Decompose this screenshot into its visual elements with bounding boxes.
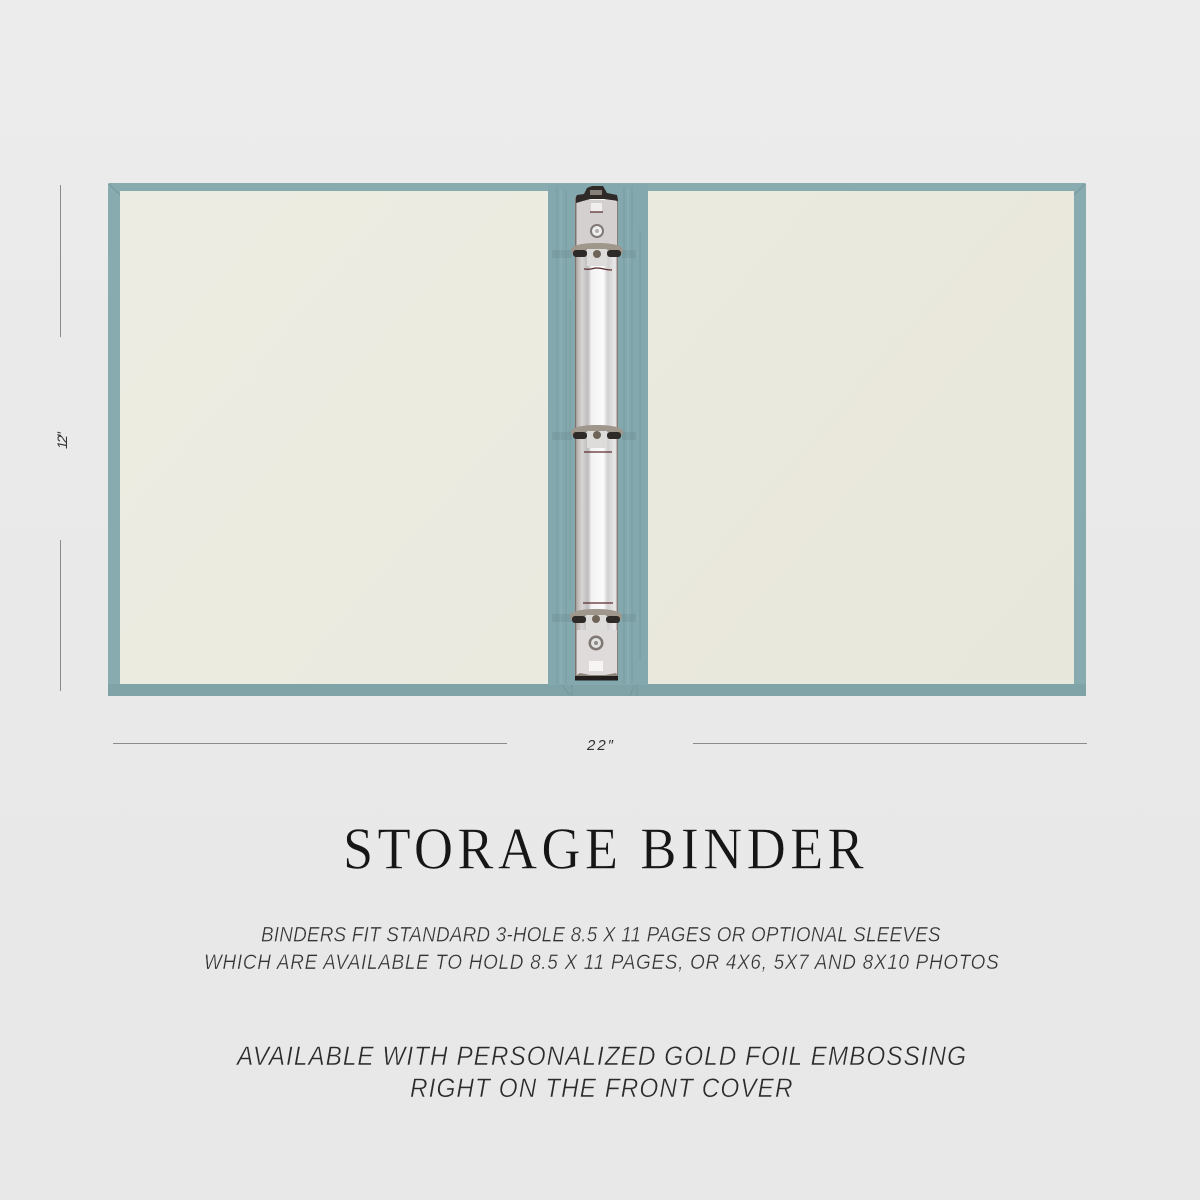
ring shadows (552, 254, 636, 618)
ring 3 (570, 609, 622, 630)
embossing note: AVAILABLE WITH PERSONALIZED GOLD FOIL EMBOSSING (235, 1042, 966, 1071)
description: WHICH ARE AVAILABLE TO HOLD 8.5 X 11 PAGES, OR 4X6, 5X7 AND 8X10 PHOTOS (204, 951, 999, 974)
binder cover (108, 183, 1086, 696)
title: STORAGE BINDER (343, 816, 864, 882)
lower plate (577, 630, 617, 676)
top end cap (576, 186, 618, 203)
ring 1 (571, 243, 623, 266)
cover corner folds (109, 184, 1085, 696)
ring mechanism (552, 186, 636, 680)
description (204, 924, 999, 974)
left cover sheet (120, 191, 548, 684)
lower plate slot (589, 661, 603, 671)
spine panel (548, 184, 648, 685)
upper rivet (590, 224, 604, 238)
top plate (577, 200, 617, 246)
embossing note (235, 1042, 966, 1103)
ring 2 (571, 425, 623, 448)
width dimension: 22 inches: 22″ (586, 737, 614, 754)
description: BINDERS FIT STANDARD 3-HOLE 8.5 X 11 PAGES OR OPTIONAL SLEEVES (261, 924, 941, 947)
bottom end cap (575, 673, 618, 680)
metal tube (575, 197, 618, 680)
cover bottom edge (108, 684, 1086, 696)
embossing note: RIGHT ON THE FRONT COVER (410, 1074, 793, 1103)
height dimension: 12 inches: 12″ (54, 431, 70, 449)
binder: open cover with sheets and ring mechanism (108, 183, 1086, 696)
lower rivet (588, 636, 604, 650)
right cover sheet (648, 191, 1074, 684)
